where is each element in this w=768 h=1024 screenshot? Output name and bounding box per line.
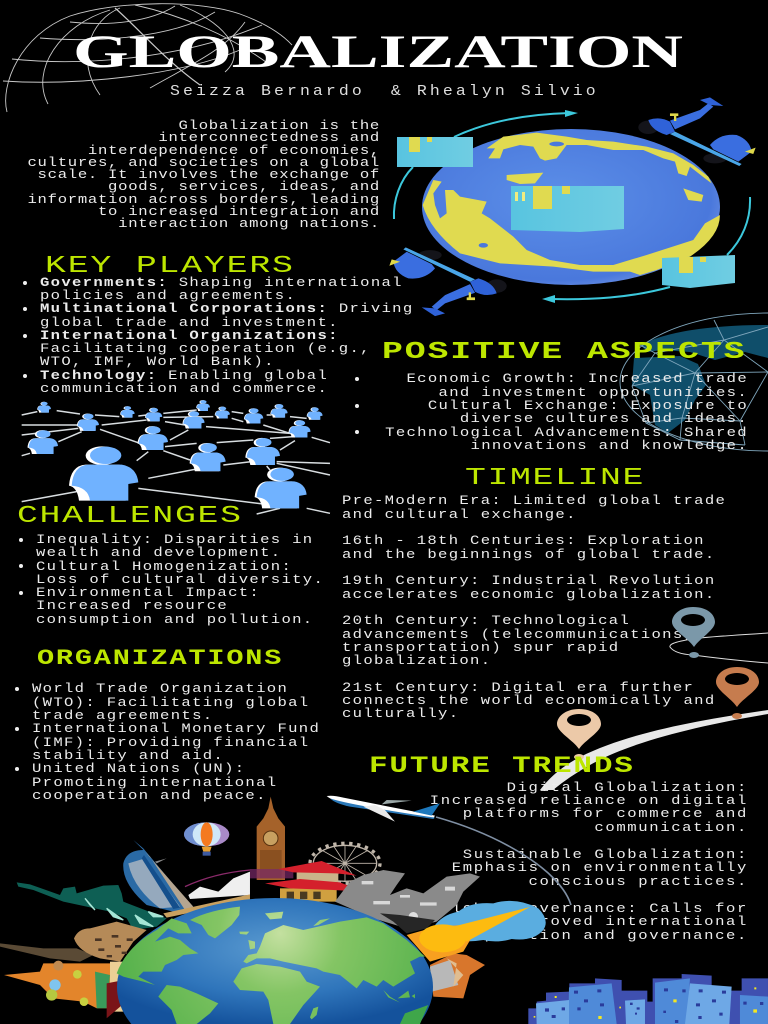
timeline text: 20th Century: Technological: [342, 614, 630, 629]
list text: Facilitating cooperation (e.g.,: [40, 342, 371, 357]
list text: Technological Advancements: Shared: [385, 426, 748, 441]
list text: [40, 276, 414, 397]
illustration: world landmarks on globe: [0, 796, 768, 1024]
pin: beige: [557, 709, 601, 749]
pin: blue-grey: [672, 607, 715, 647]
sandy shore: [163, 894, 250, 918]
list text: wealth and development.: [36, 546, 281, 561]
list text: Economic Growth: Increased trade: [407, 372, 748, 387]
key players list: [23, 276, 414, 397]
scooter: bottom left: [389, 247, 507, 316]
list text: United Nations (UN):: [32, 762, 245, 777]
road: [540, 710, 768, 790]
intro text: scale. It involves the exchange of: [38, 168, 380, 183]
heading: organizations: ORGANIZATIONS: [37, 646, 281, 671]
arrows around globe: [394, 110, 750, 303]
intro text: interdependence of economies,: [88, 144, 380, 159]
timeline text: 19th Century: Industrial Revolution: [342, 574, 716, 589]
list text: global trade and investment.: [40, 316, 339, 331]
bullets: [355, 377, 359, 434]
timeline text: advancements (telecommunications,: [342, 628, 694, 643]
future trends text: Emphasis on environmentally: [452, 861, 748, 876]
people: [27, 400, 323, 508]
city skyline: [528, 974, 768, 1024]
list text: stability and aid.: [32, 749, 224, 764]
list text: Multinational Corporations: Driving: [40, 302, 414, 317]
st basil's cathedral: [4, 961, 124, 1018]
left landmarks: [0, 822, 250, 1018]
map pins and route: [540, 607, 768, 790]
list text: Governments: Shaping international: [40, 276, 403, 291]
timeline text: and cultural exchange.: [342, 508, 577, 523]
network of people illustration: [22, 400, 330, 514]
future trends text: platforms for commerce and: [463, 807, 748, 822]
pin: orange: [716, 667, 759, 707]
future trends text: Increased reliance on digital: [430, 794, 748, 809]
right landmarks: [250, 796, 546, 998]
list text: [32, 682, 320, 804]
list text: (WTO): Facilitating global: [32, 696, 309, 711]
intro text: interaction among nations.: [118, 217, 380, 232]
list text: [385, 372, 748, 454]
title: GLOBALIZATION: [73, 26, 683, 78]
heading: timeline: TIMELINE: [465, 464, 643, 491]
list text: World Trade Organization: [32, 682, 288, 697]
list text: policies and agreements.: [40, 289, 296, 304]
timeline text: and the beginnings of global trade.: [342, 548, 716, 563]
wireframe globe behind title: [3, 4, 292, 112]
intro text: cultures, and societies on a global: [27, 156, 380, 171]
sydney opera house bridge: [185, 870, 250, 887]
future trends text: cooperation and governance.: [452, 929, 748, 944]
parcel: bottom right: [662, 255, 735, 288]
list text: communication and commerce.: [40, 382, 328, 397]
sydney opera house: [188, 872, 250, 899]
intro text: Globalization is the: [179, 119, 380, 134]
timeline text: [342, 494, 726, 722]
list text: Loss of cultural diversity.: [36, 573, 324, 588]
intro text: to increased integration and: [98, 205, 380, 220]
timeline text: Pre-Modern Era: Limited global trade: [342, 494, 726, 509]
continents: [117, 907, 428, 1024]
bullets: [23, 281, 27, 378]
list text: WTO, IMF, World Bank).: [40, 355, 275, 370]
list text: Inequality: Disparities in: [36, 533, 313, 548]
earth: [117, 898, 433, 1024]
organizations list: [15, 682, 320, 804]
hot air balloon: [184, 822, 229, 856]
future trends text: Digital Globalization:: [507, 781, 748, 796]
network globe behind positive aspects: [620, 313, 768, 451]
list text: cooperation and peace.: [32, 789, 267, 804]
list text: Cultural Homogenization:: [36, 560, 292, 575]
intro text: [27, 119, 380, 232]
heading: positive aspects: POSITIVE ASPECTS: [382, 338, 745, 365]
list text: Technology: Enabling global: [40, 369, 328, 384]
positive aspects list: [355, 372, 748, 454]
blue globe: [422, 129, 720, 285]
list text: Environmental Impact:: [36, 586, 260, 601]
timeline text: 16th - 18th Centuries: Exploration: [342, 534, 705, 549]
dark trees: [380, 913, 435, 933]
big ben: [257, 797, 285, 880]
heading: key players: KEY PLAYERS: [45, 252, 293, 279]
intro text: information across borders, leading: [27, 193, 380, 208]
timeline text: accelerates economic globalization.: [342, 588, 716, 603]
future trends text: communication.: [594, 821, 748, 836]
timeline text: culturally.: [342, 707, 459, 722]
red pagoda: [265, 861, 363, 902]
future trends text: [430, 781, 748, 944]
heading: challenges: CHALLENGES: [17, 502, 241, 529]
timeline text: transportation) spur rapid: [342, 641, 619, 656]
thin route: [670, 633, 768, 663]
intro text: goods, services, ideas, and: [108, 180, 380, 195]
list text: trade agreements.: [32, 709, 213, 724]
list text: Cultural Exchange: Exposure to: [428, 399, 748, 414]
gray cathedral: [335, 870, 480, 928]
authors: Seizza Bernardo & Rhealyn Silvio: [170, 83, 596, 100]
ferris wheel: [310, 843, 380, 883]
list text: Promoting international: [32, 776, 277, 791]
list text: Increased resource: [36, 599, 228, 614]
future trends text: Sustainable Globalization:: [463, 848, 748, 863]
parcel: centre: [511, 186, 624, 232]
airplane: [327, 796, 440, 822]
list text: innovations and knowledge.: [471, 439, 748, 454]
challenges list: [19, 533, 324, 628]
yellow continents: [423, 133, 720, 275]
thai temple: [430, 953, 485, 998]
burj al arab: [123, 840, 193, 912]
future trends text: conscious practices.: [529, 875, 748, 890]
future trends text: improved international: [507, 915, 748, 930]
bridge deck over tower: [250, 869, 293, 878]
heading: future trends: FUTURE TRENDS: [369, 753, 633, 780]
scooter: top right: [638, 97, 756, 166]
colosseum: [74, 922, 147, 962]
eiffel tower: [0, 943, 93, 962]
list text: [36, 533, 324, 628]
list text: and investment opportunities.: [439, 386, 748, 401]
bullets: [19, 538, 23, 595]
illustration: globe with parcels and scooters: [389, 97, 756, 316]
flight path: [436, 817, 571, 905]
intro text: interconnectedness and: [158, 131, 380, 146]
connecting lines: [22, 410, 330, 514]
bullets: [15, 687, 19, 771]
timeline text: 21st Century: Digital era further: [342, 681, 694, 696]
list text: consumption and pollution.: [36, 613, 313, 628]
list text: International Organizations:: [40, 329, 339, 344]
timeline text: globalization.: [342, 654, 491, 669]
list text: diverse cultures and ideas.: [460, 412, 748, 427]
cloud: [434, 901, 546, 941]
list text: (IMF): Providing financial: [32, 736, 309, 751]
golden pagoda: [407, 907, 530, 962]
future trends text: Global Governance: Calls for: [441, 902, 748, 917]
timeline text: connects the world economically and: [342, 694, 716, 709]
parcel: top left: [397, 137, 473, 167]
list text: International Monetary Fund: [32, 722, 320, 737]
statue of liberty: [17, 882, 167, 930]
